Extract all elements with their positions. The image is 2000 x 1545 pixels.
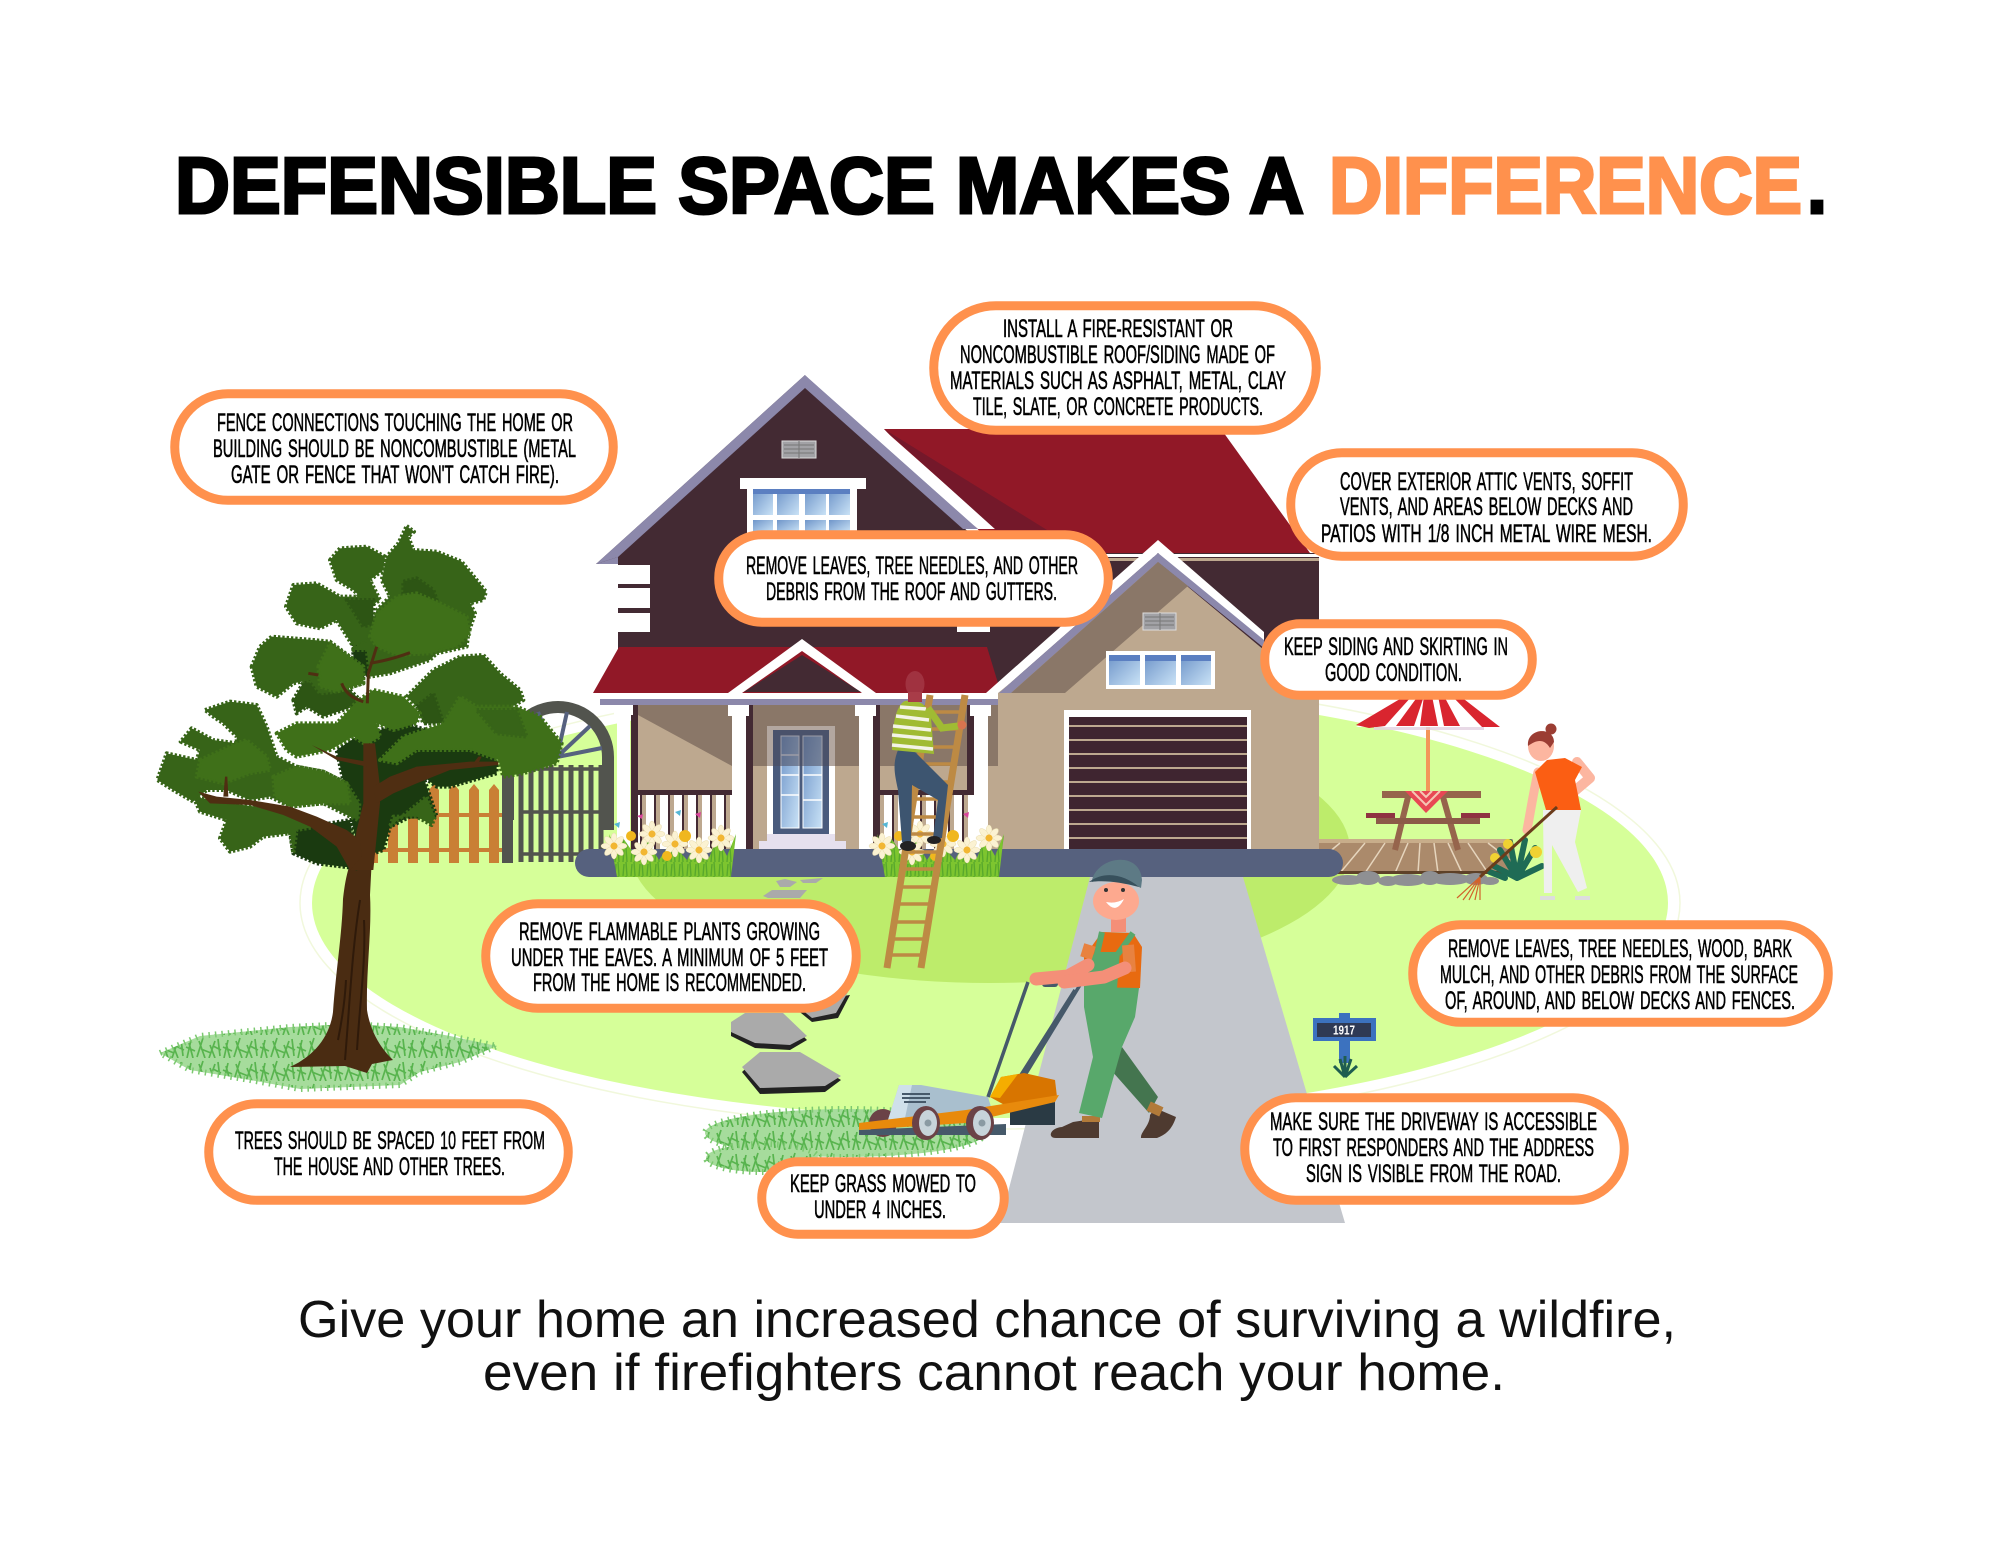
garage vent xyxy=(1143,613,1176,630)
callout: roof and gutters xyxy=(719,535,1108,622)
callout: roof and gutters: REMOVE LEAVES, TREE NEEDLES, AND OTHER xyxy=(746,552,1078,580)
railings xyxy=(638,790,974,849)
callout: tree spacing: TREES SHOULD BE SPACED 10 FEET FROM xyxy=(235,1127,545,1155)
porch columns xyxy=(614,705,991,849)
callout: roof and gutters: DEBRIS FROM THE ROOF AND GUTTERS. xyxy=(766,578,1057,606)
main red roof xyxy=(884,429,1310,553)
back leg xyxy=(1111,1047,1158,1113)
head xyxy=(1093,882,1139,920)
driveway xyxy=(1000,877,1345,1223)
man on ladder xyxy=(892,671,966,851)
address sign: 1917 xyxy=(1333,1022,1355,1038)
gardener mowing xyxy=(1036,860,1176,1138)
closing message xyxy=(298,1291,1676,1402)
fascia xyxy=(593,693,1009,705)
fence xyxy=(348,784,505,863)
flower bed left xyxy=(601,810,736,877)
garden gate xyxy=(502,707,610,863)
cap xyxy=(1092,860,1142,888)
shoes xyxy=(1051,1108,1176,1138)
tree trunk xyxy=(290,745,393,1073)
callout: siding and skirting: GOOD CONDITION. xyxy=(1325,659,1462,687)
callout: deck debris xyxy=(1413,925,1828,1022)
callout: flammable plants: REMOVE FLAMMABLE PLANTS GROWING xyxy=(519,918,820,946)
sleeves xyxy=(1086,945,1130,972)
callout: tree spacing xyxy=(209,1104,568,1200)
picnic table xyxy=(1366,791,1490,850)
callout: grass height xyxy=(762,1162,1004,1234)
callout: roof and siding materials: INSTALL A FIRE-RESISTANT OR xyxy=(1003,315,1233,343)
callout: fence connections: FENCE CONNECTIONS TOUCHING THE HOME OR xyxy=(217,409,573,437)
callout: attic vents: PATIOS WITH 1/8 INCH METAL WIRE MESH. xyxy=(1321,520,1652,548)
garage window xyxy=(1106,651,1215,689)
callout: attic vents: COVER EXTERIOR ATTIC VENTS, SOFFIT xyxy=(1340,468,1633,496)
callout: flammable plants: UNDER THE EAVES. A MINIMUM OF 5 FEET xyxy=(511,944,828,972)
gable vent xyxy=(782,441,816,458)
foundation xyxy=(575,849,1343,877)
shirt xyxy=(1084,932,1142,988)
upper window xyxy=(740,478,866,539)
deck xyxy=(1319,839,1513,874)
callout: grass height: KEEP GRASS MOWED TO xyxy=(790,1170,976,1198)
lawn xyxy=(300,677,1680,1129)
tree xyxy=(157,526,562,1073)
house xyxy=(593,368,1319,849)
patio umbrella xyxy=(1356,693,1500,793)
callout: tree spacing: THE HOUSE AND OTHER TREES. xyxy=(274,1153,505,1181)
closing message: even if firefighters cannot reach your home. xyxy=(483,1344,1505,1402)
garden shrub xyxy=(1490,840,1542,878)
neck xyxy=(1111,915,1126,932)
callout: siding and skirting: KEEP SIDING AND SKIRTING IN xyxy=(1284,633,1508,661)
flower bed right xyxy=(869,810,1004,877)
callout: driveway access xyxy=(1245,1098,1624,1200)
callout: roof and siding materials: MATERIALS SUCH AS ASPHALT, METAL, CLAY xyxy=(950,367,1286,395)
title: DEFENSIBLE SPACE MAKES A xyxy=(175,141,1304,230)
callout: driveway access: MAKE SURE THE DRIVEWAY IS ACCESSIBLE xyxy=(1270,1108,1597,1136)
garage door xyxy=(1064,710,1251,849)
title: . xyxy=(1807,141,1827,230)
ladder xyxy=(887,695,965,968)
deck stones xyxy=(1332,871,1499,886)
garage xyxy=(986,540,1319,849)
callout: attic vents: VENTS, AND AREAS BELOW DECKS AND xyxy=(1340,493,1633,521)
woman raking xyxy=(1457,724,1590,900)
closing message: Give your home an increased chance of surviving a wildfire, xyxy=(298,1291,1676,1349)
callout: roof and siding materials xyxy=(934,306,1316,430)
callout: flammable plants xyxy=(486,904,856,1008)
callout: roof and siding materials: NONCOMBUSTIBLE ROOF/SIDING MADE OF xyxy=(960,341,1275,369)
porch gable xyxy=(728,639,876,693)
callout: driveway access: SIGN IS VISIBLE FROM THE ROAD. xyxy=(1306,1160,1561,1188)
callout: roof and siding materials: TILE, SLATE, OR CONCRETE PRODUCTS. xyxy=(973,393,1263,421)
tree branches xyxy=(198,647,498,870)
stepping stones xyxy=(731,878,850,1094)
callout: grass height: UNDER 4 INCHES. xyxy=(814,1196,946,1224)
lawn grass strip xyxy=(705,1109,985,1172)
callout: fence connections: GATE OR FENCE THAT WON'T CATCH FIRE). xyxy=(231,461,559,489)
overalls xyxy=(1079,987,1139,1118)
siding boards xyxy=(618,565,990,632)
arms xyxy=(1036,965,1088,979)
rear upper wall xyxy=(1000,553,1319,703)
foliage xyxy=(157,526,562,870)
front door xyxy=(759,726,846,849)
title: DIFFERENCE xyxy=(1329,141,1802,230)
callout: siding and skirting xyxy=(1265,624,1532,695)
roof shadow xyxy=(884,429,1047,530)
callout: fence connections: BUILDING SHOULD BE NONCOMBUSTIBLE (METAL xyxy=(213,435,576,463)
porch wall xyxy=(631,705,1000,849)
callout: driveway access: TO FIRST RESPONDERS AND THE ADDRESS xyxy=(1273,1134,1594,1162)
callout: flammable plants: FROM THE HOME IS RECOMMENDED. xyxy=(533,969,806,997)
lawn mower xyxy=(859,980,1080,1140)
address sign xyxy=(1313,1013,1376,1077)
callout: fence connections xyxy=(175,394,613,500)
main gable xyxy=(596,368,1060,700)
porch roof xyxy=(593,647,1001,693)
callout: attic vents xyxy=(1291,453,1683,556)
grass under tree xyxy=(160,1024,497,1089)
